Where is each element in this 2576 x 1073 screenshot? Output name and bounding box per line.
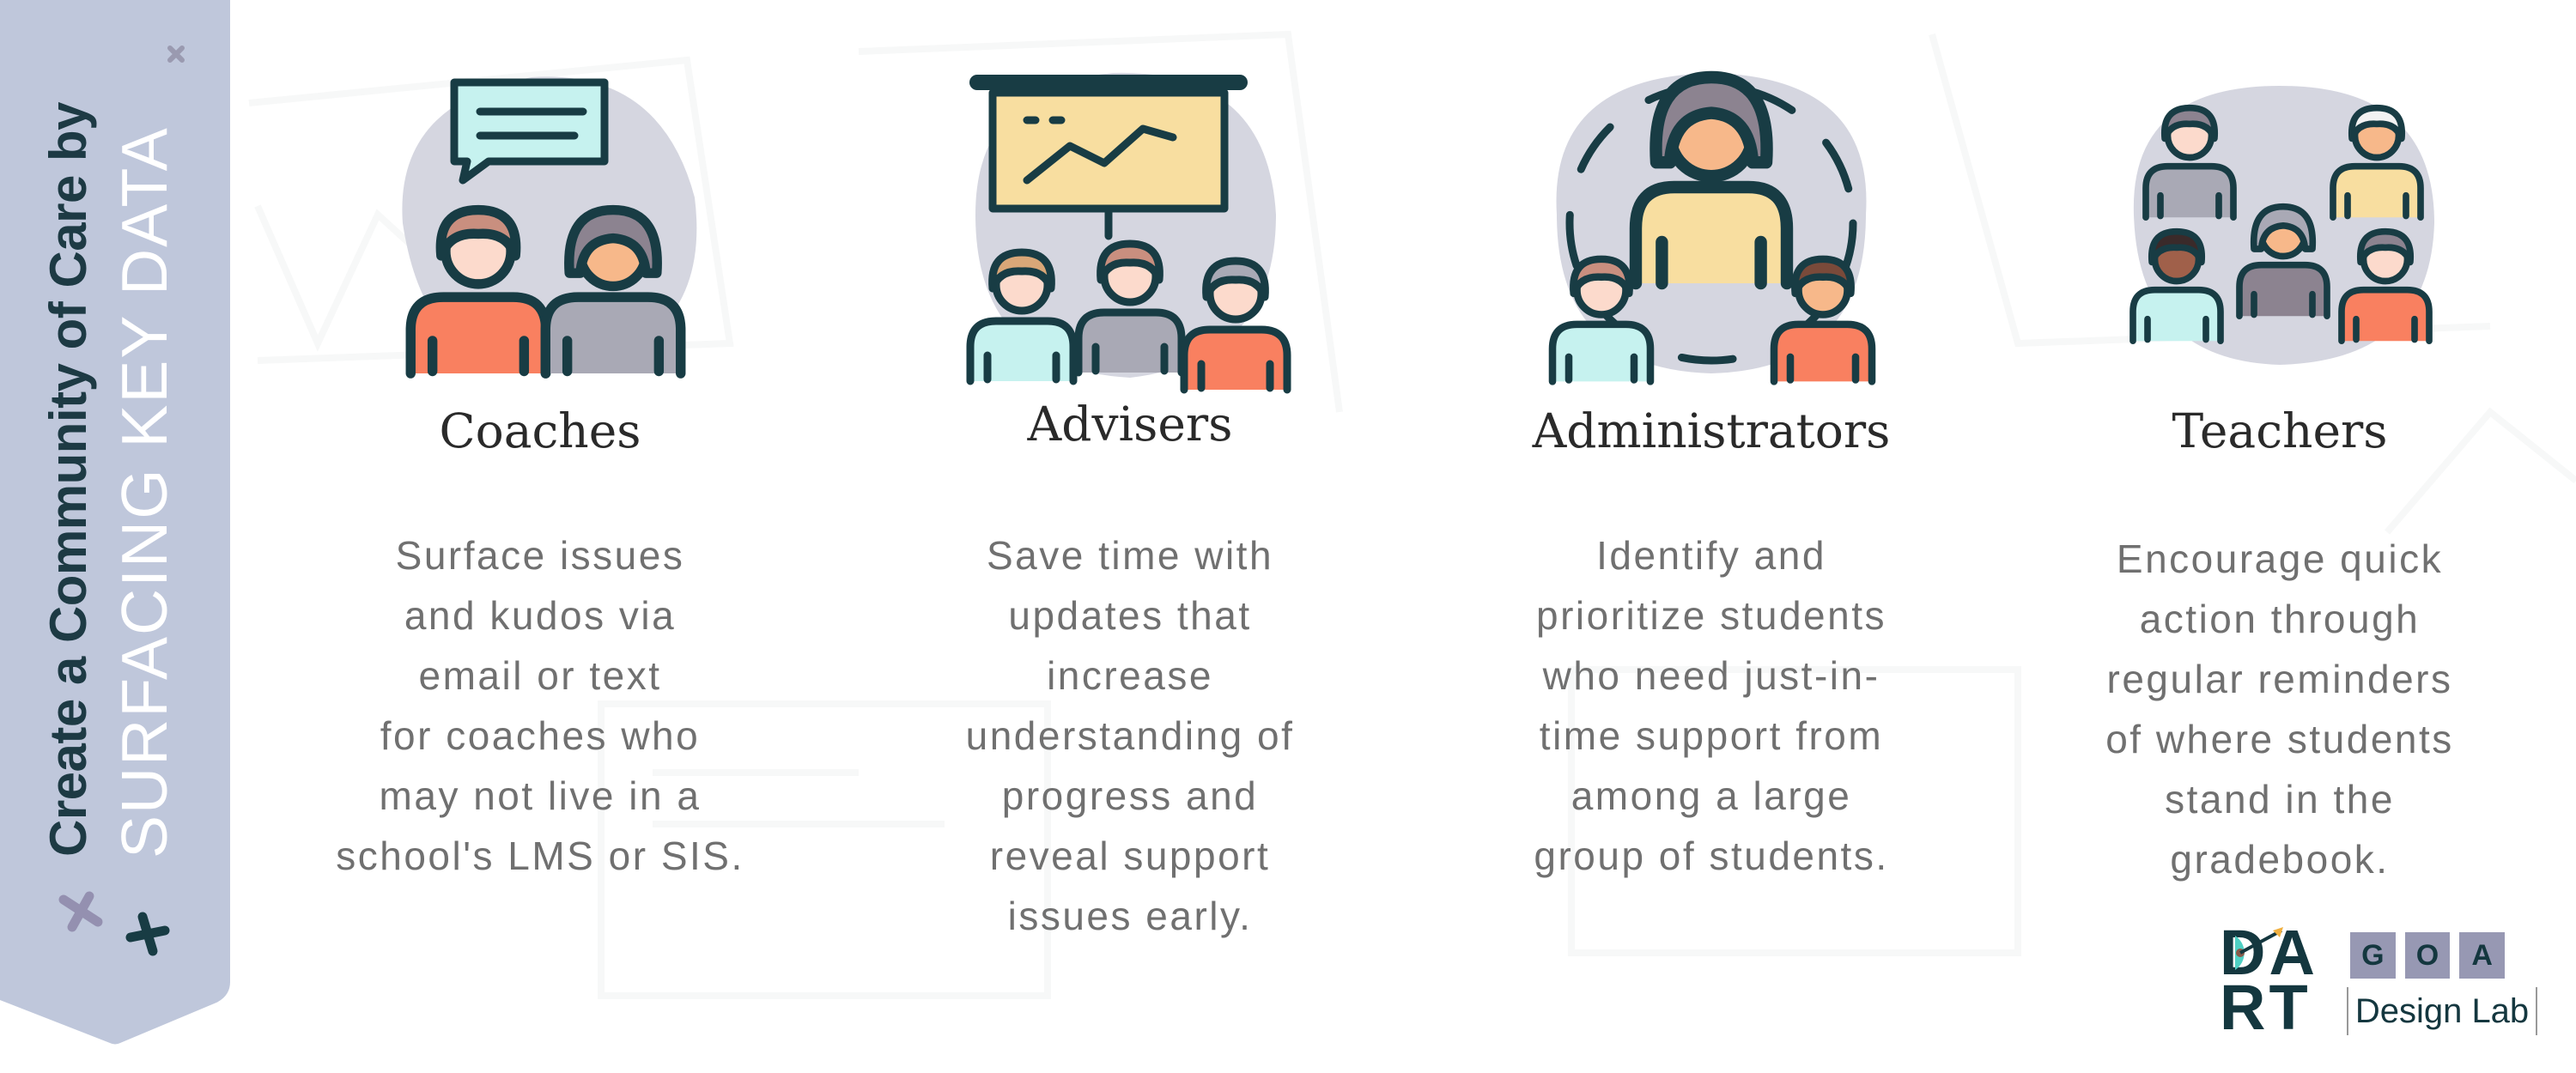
- text: administrators: who need just-in-: [1543, 653, 1880, 698]
- logo: DART GOA Design Lab: [2220, 917, 2537, 1043]
- logo: DART GOA Design Lab: G: [2361, 939, 2385, 972]
- text: advisers: updates that: [1008, 593, 1252, 638]
- text: teachers: of where students: [2105, 717, 2454, 761]
- text: coaches: may not live in a: [380, 773, 701, 818]
- icon: advisers: [967, 72, 1291, 393]
- text: teachers: Encourage quick: [2117, 536, 2443, 581]
- text: teachers: gradebook.: [2170, 837, 2390, 882]
- heading: advisers: Advisers: [1028, 397, 1232, 452]
- text: administrators: among a large: [1571, 773, 1851, 818]
- text: advisers: reveal support: [990, 834, 1270, 878]
- text: administrators: group of students.: [1534, 834, 1889, 878]
- text: coaches: for coaches who: [380, 713, 700, 758]
- text: coaches: and kudos via: [404, 593, 676, 638]
- text: administrators: prioritize students: [1536, 593, 1886, 638]
- sidebar ribbon: [0, 0, 230, 1044]
- text: coaches: school's LMS or SIS.: [336, 834, 744, 878]
- sidebar ribbon: SURFACING KEY DATA: [108, 126, 180, 858]
- icon: coaches: [402, 76, 697, 379]
- text: teachers: regular reminders: [2107, 657, 2452, 701]
- text: teachers: stand in the: [2165, 777, 2395, 821]
- text: advisers: understanding of: [966, 713, 1294, 758]
- icon: teachers: [2129, 86, 2434, 365]
- panel: advisers: [966, 72, 1294, 938]
- panel: teachers: [2105, 86, 2454, 882]
- logo: DART GOA Design Lab: DA: [2220, 917, 2318, 988]
- text: advisers: Save time with: [987, 533, 1273, 578]
- logo: DART GOA Design Lab: A: [2471, 939, 2493, 972]
- logo: DART GOA Design Lab: RT: [2220, 972, 2312, 1043]
- text: advisers: increase: [1047, 653, 1213, 698]
- text: coaches: Surface issues: [396, 533, 684, 578]
- text: administrators: Identify and: [1596, 533, 1826, 578]
- icon: dart: [2235, 927, 2283, 970]
- text: teachers: action through: [2140, 597, 2420, 641]
- icon: x marks: [64, 48, 182, 951]
- logo: DART GOA Design Lab: Design Lab: [2355, 992, 2529, 1030]
- logo: DART GOA Design Lab: O: [2416, 939, 2439, 972]
- panel: administrators: [1532, 70, 1890, 878]
- text: administrators: time support from: [1540, 713, 1883, 758]
- heading: teachers: Teachers: [2172, 403, 2388, 458]
- text: advisers: [966, 533, 1294, 938]
- sidebar title: Create a Community of Care by: [39, 102, 97, 857]
- text: advisers: issues early.: [1008, 894, 1252, 938]
- text: administrators: [1534, 533, 1889, 878]
- heading: coaches: Coaches: [440, 403, 641, 458]
- panel: coaches: [336, 76, 744, 878]
- text: teachers: [2105, 536, 2454, 882]
- text: advisers: progress and: [1002, 773, 1258, 818]
- text: coaches: email or text: [418, 653, 662, 698]
- text: coaches: [336, 533, 744, 878]
- heading: administrators: Administrators: [1533, 403, 1890, 458]
- icon: administrators: [1549, 70, 1875, 385]
